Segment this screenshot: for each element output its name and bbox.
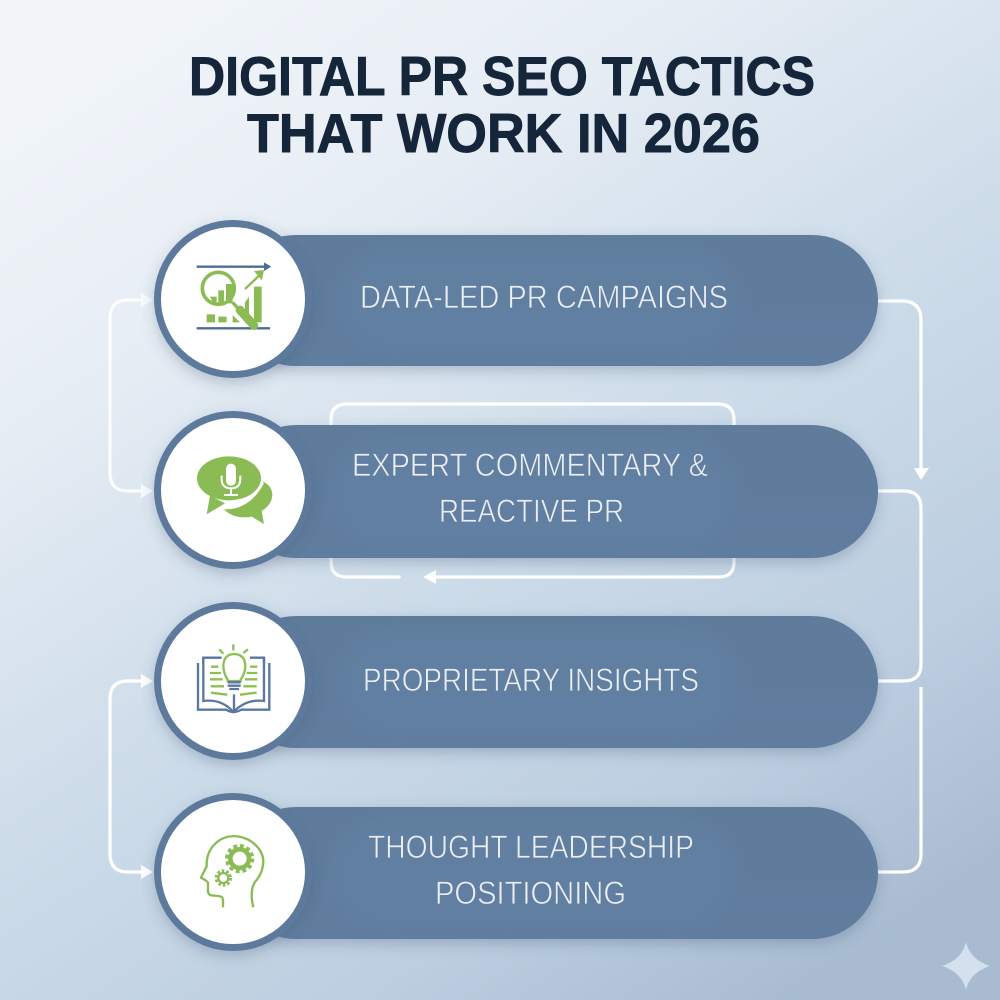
panel: expert commentary and reactive PR: REACTIVE PR [439,493,624,529]
panel: expert commentary and reactive PR: EXPERT COMMENTARY & [352,447,708,483]
arrow: left connector between first two circles [110,293,153,498]
title: DIGITAL PR SEO TACTICS [189,45,815,107]
title: THAT WORK IN 2026 [247,102,760,164]
icon: sparkle [942,942,990,990]
arrow: left connector between last two circles [110,674,153,879]
arrow: bar three to bar four on the right [877,687,921,872]
arrow: bar one to bar two on the right [877,301,929,480]
icon: speech bubbles with microphone [158,414,308,566]
icon: head with gears [158,796,308,948]
panel: thought leadership positioning [158,796,878,948]
icon: analytics magnifier [158,224,308,374]
title [189,45,815,164]
arrow: loop around expert commentary bar [331,404,734,584]
panel: data-led PR campaigns: DATA-LED PR CAMPAIGNS [360,279,728,315]
panel: expert commentary and reactive PR [158,414,878,566]
panel: thought leadership positioning: POSITIONING [435,875,626,911]
panel: thought leadership positioning: THOUGHT LEADERSHIP [368,829,694,865]
panel: data-led PR campaigns [158,224,878,374]
arrow: bar two to bar three on the right [877,491,921,681]
icon: open book with light bulb [158,606,308,756]
panel: proprietary insights: PROPRIETARY INSIGHTS [363,662,699,698]
panel: proprietary insights [158,606,878,756]
